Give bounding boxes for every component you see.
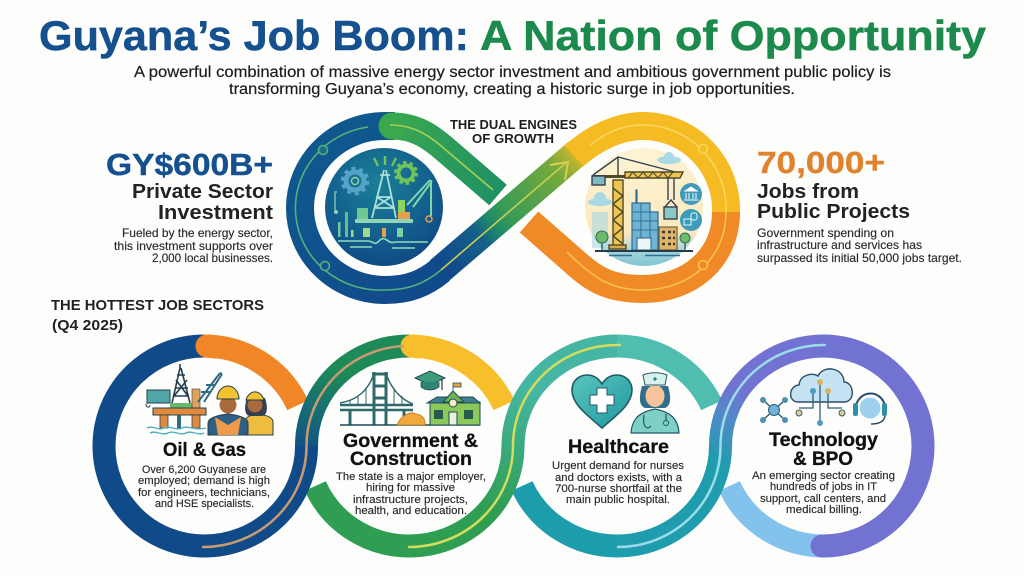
title: Guyana’s Job Boom: xyxy=(39,12,469,59)
ring 3: teal arc xyxy=(617,346,712,405)
connector: ring 2 to ring 3 xyxy=(409,346,617,546)
ribbon accent lines xyxy=(203,345,825,547)
text: healthcare: and doctors exists, with a xyxy=(555,472,683,484)
icon: oil rig xyxy=(146,364,222,434)
heading: hottest job sectors xyxy=(51,297,264,334)
stat: private sector investment: Fueled by the energy sector, xyxy=(122,226,273,240)
subtitle: A powerful combination of massive energy sector investment and ambitious government public policy is xyxy=(134,64,891,81)
text: technology and BPO: Technology xyxy=(769,429,878,451)
connector: ring 3 to ring 4 xyxy=(617,346,824,546)
heading: hottest job sectors: THE HOTTEST JOB SECTORS xyxy=(51,297,264,314)
ring 2: lower green arc xyxy=(315,486,409,546)
text: healthcare: Urgent demand for nurses xyxy=(552,460,685,472)
sector card: government and construction xyxy=(336,371,486,517)
text: oil and gas: and HSE specialists. xyxy=(155,498,254,510)
stat: private sector investment: this investment supports over xyxy=(114,239,273,253)
loop: inner accent lines xyxy=(295,125,726,290)
loop: orange right xyxy=(529,212,726,289)
text: oil and gas: for engineers, technicians, xyxy=(138,487,270,499)
ring 4: purple band xyxy=(822,346,923,546)
text: technology and BPO: support, call centers, and xyxy=(760,493,886,505)
icon: service badges xyxy=(680,183,702,231)
text: technology and BPO: & BPO xyxy=(793,448,853,470)
stat: public projects jobs: surpassed its initial 50,000 jobs target. xyxy=(757,251,962,265)
icon: gold pile xyxy=(397,413,425,425)
text: technology and BPO: medical billing. xyxy=(786,504,862,516)
text: government and construction: Construction xyxy=(350,448,472,470)
icon: cloud circuit xyxy=(791,369,852,426)
loop: green top xyxy=(392,126,498,195)
text: government and construction: The state is a major employer, xyxy=(336,471,486,483)
stat: private sector investment: Private Sector xyxy=(132,181,273,203)
icon: heart with cross xyxy=(572,375,632,428)
text: oil and gas: Over 6,200 Guyanese are xyxy=(142,464,266,476)
stat: private sector investment: Investment xyxy=(158,202,273,224)
icon: graduation cap xyxy=(415,371,445,390)
icon: ground and trees xyxy=(595,231,693,256)
stat: public projects jobs: Public Projects xyxy=(757,201,910,223)
stat: private sector investment: 2,000 local businesses. xyxy=(152,251,273,265)
heading: dual engines xyxy=(450,118,577,146)
text: government and construction: Government & xyxy=(343,430,478,452)
icon: school xyxy=(427,383,480,425)
sector card: healthcare xyxy=(552,373,685,506)
icon: gears xyxy=(342,162,416,194)
text: healthcare xyxy=(552,436,685,506)
ring 2: yellow start cap xyxy=(412,346,418,347)
stat: public projects jobs: Government spending on xyxy=(757,226,894,240)
text: government and construction: health, and education. xyxy=(355,505,467,517)
icon: nurse xyxy=(631,373,679,433)
ribbon: sector rings xyxy=(104,345,923,547)
connector: ring 1 to ring 2 xyxy=(306,346,409,446)
ring 1: orange start cap xyxy=(207,346,215,347)
text: government and construction: infrastructure projects, xyxy=(353,494,468,506)
sector card: technology and BPO xyxy=(752,369,895,516)
stat: private sector investment xyxy=(106,147,273,265)
stat: public projects jobs xyxy=(757,145,962,265)
icon: construction circle xyxy=(585,148,703,266)
stat: public projects jobs: 70,000+ xyxy=(757,145,885,180)
stat: public projects jobs: Jobs from xyxy=(757,181,859,203)
subtitle xyxy=(134,64,891,98)
sector card: oil and gas xyxy=(138,364,273,510)
text: government and construction: hiring for massive xyxy=(366,482,455,494)
text: technology and BPO: An emerging sector creating xyxy=(752,470,895,482)
loop: yellow right xyxy=(574,126,726,214)
icon: suspension bridge xyxy=(340,372,480,425)
heading: dual engines: OF GROWTH xyxy=(472,132,554,146)
stat: private sector investment: GY$600B+ xyxy=(106,147,273,182)
text: healthcare: main public hospital. xyxy=(566,494,670,506)
loop: crossing diagonal xyxy=(439,152,578,271)
infinity loop xyxy=(295,112,726,290)
heading: hottest job sectors: (Q4 2025) xyxy=(52,317,123,334)
subtitle: transforming Guyana’s economy, creating a historic surge in job opportunities. xyxy=(229,81,795,98)
text: government and construction xyxy=(336,430,486,517)
title: A Nation of Opportunity xyxy=(480,12,987,59)
heading: dual engines: THE DUAL ENGINES xyxy=(450,118,577,132)
stat: public projects jobs: infrastructure and services has xyxy=(757,238,922,252)
ring 4: light blue arc xyxy=(729,486,824,546)
icon: network hub xyxy=(760,397,788,423)
text: healthcare: 700-nurse shortfail at the xyxy=(555,483,682,495)
icon: blue building xyxy=(632,190,677,250)
loop: blue left xyxy=(300,126,441,290)
text: technology and BPO xyxy=(752,429,895,516)
icon: energy sector circle xyxy=(325,148,443,266)
ring 1: orange arc xyxy=(204,346,298,405)
icon: headset xyxy=(853,394,887,424)
title xyxy=(39,12,987,59)
ring 1: navy band xyxy=(104,346,306,546)
text: oil and gas xyxy=(138,439,270,510)
text: oil and gas: Oil & Gas xyxy=(163,439,246,461)
icon: offshore platform xyxy=(334,180,432,248)
text: oil and gas: employed; demand is high xyxy=(138,475,270,487)
icon: clouds xyxy=(588,152,681,248)
icon: derrick xyxy=(372,156,396,218)
ring 2: yellow arc xyxy=(409,346,504,405)
icon: workers xyxy=(208,386,273,435)
icon: tower crane xyxy=(592,157,683,249)
ring 3: lower teal arc xyxy=(522,486,617,546)
text: healthcare: Healthcare xyxy=(568,436,669,458)
text: technology and BPO: hundreds of jobs in IT xyxy=(770,481,877,493)
